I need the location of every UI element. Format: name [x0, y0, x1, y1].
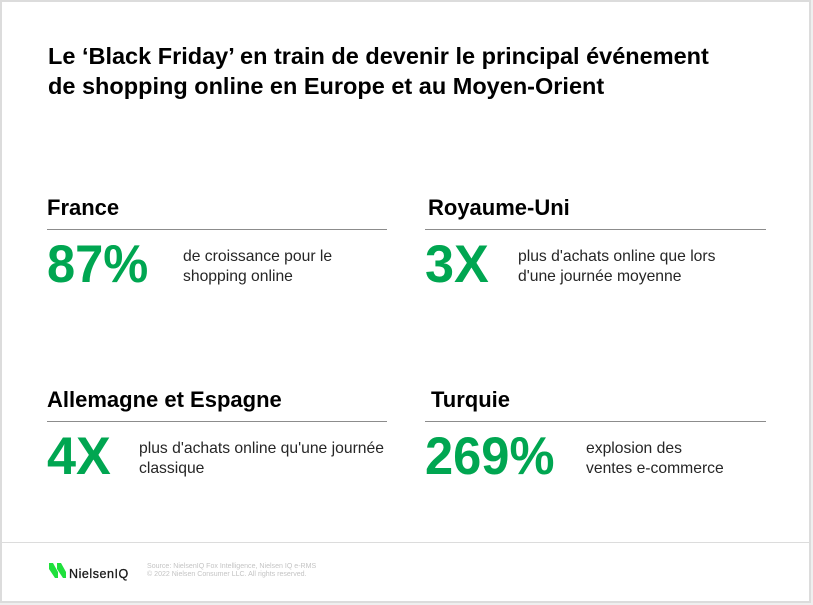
heading: France: France: [47, 195, 119, 220]
stat: 4X: 4X: [47, 427, 111, 486]
description: Allemagne et Espagne: [139, 440, 384, 476]
stat: 87%: 87%: [47, 235, 148, 294]
description: Allemagne et Espagne: plus d'achats online qu'une journée: [139, 440, 384, 457]
description: Royaume-Uni: d'une journée moyenne: [518, 268, 681, 284]
heading: Royaume-Uni: Royaume-Uni: [428, 195, 570, 220]
title: Le ‘Black Friday’ en train de devenir le principal événement: [48, 43, 709, 69]
description: Turquie: ventes e-commerce: [586, 460, 724, 476]
description: Allemagne et Espagne: classique: [139, 460, 204, 476]
description: Royaume-Uni: plus d'achats online que lors: [518, 248, 715, 265]
stat: 3X: 3X: [425, 235, 489, 294]
panel: France: [47, 195, 387, 294]
source note: [147, 562, 316, 578]
title: de shopping online en Europe et au Moyen-Orient: [48, 73, 604, 99]
description: France: shopping online: [183, 268, 293, 284]
heading: Allemagne et Espagne: Allemagne et Espagne: [47, 387, 282, 412]
stat: 269%: 269%: [425, 427, 554, 486]
panel: Allemagne et Espagne: [47, 387, 387, 486]
panel: Royaume-Uni: [425, 195, 766, 294]
description: Royaume-Uni: [518, 248, 715, 284]
description: France: [183, 248, 332, 284]
description: Turquie: explosion des: [586, 440, 682, 457]
heading: Turquie: Turquie: [431, 387, 510, 412]
description: France: de croissance pour le: [183, 248, 332, 265]
logo wordmark: NielsenIQ: [69, 567, 129, 581]
icon: NielsenIQ logo mark: [49, 563, 66, 578]
source note: Source: NielsenIQ Fox Intelligence, Nielsen IQ e-RMS: [147, 563, 316, 570]
description: Turquie: [586, 440, 724, 476]
panel: Turquie: [425, 387, 766, 486]
source note: © 2022 Nielsen Consumer LLC. All rights reserved.: [147, 571, 307, 578]
title: [48, 43, 709, 99]
